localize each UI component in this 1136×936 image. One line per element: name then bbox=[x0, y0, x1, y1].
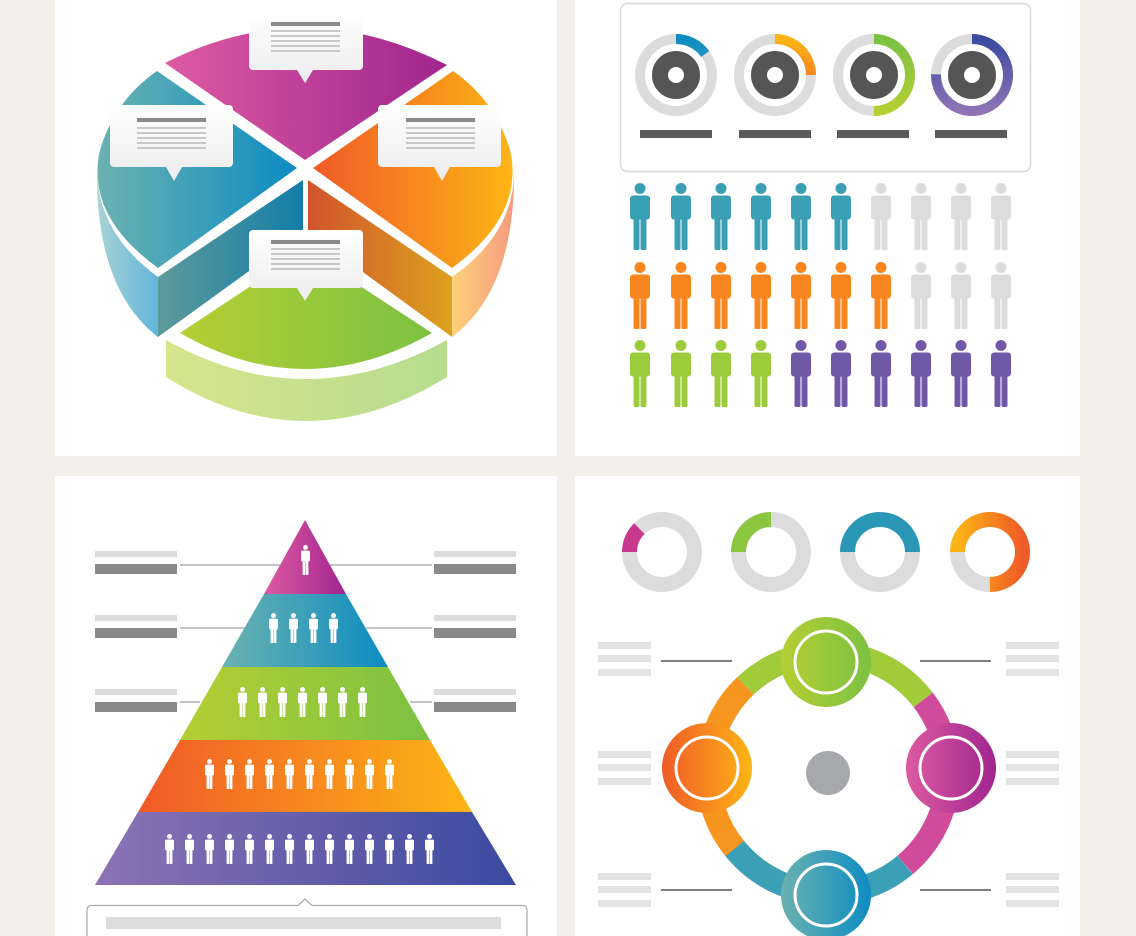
pyramid labels right bbox=[330, 551, 516, 712]
callout: right bbox=[378, 105, 501, 181]
pie slice: green bbox=[180, 250, 432, 369]
cycle ring bbox=[658, 603, 998, 936]
pyramid bbox=[95, 520, 516, 885]
panel: pyramid bbox=[55, 476, 557, 936]
center dot bbox=[806, 751, 850, 795]
pie left side face bbox=[97, 175, 158, 337]
side text lines bbox=[598, 642, 1059, 907]
people row 2 bbox=[630, 262, 1011, 329]
panel: people statistics bbox=[575, 0, 1080, 456]
callout: bottom bbox=[249, 230, 363, 301]
pyramid labels left bbox=[95, 551, 280, 712]
callout: left bbox=[110, 105, 233, 181]
panel: cycle diagram bbox=[575, 476, 1080, 936]
people row 3 bbox=[630, 340, 1011, 407]
donut summary box bbox=[620, 4, 1030, 172]
pie slice: teal bbox=[97, 71, 297, 268]
pie slice: orange bbox=[313, 71, 513, 268]
pie slice: magenta bbox=[165, 28, 447, 160]
cycle nodes bbox=[662, 617, 996, 936]
pie green base bbox=[166, 340, 447, 421]
callout: top bbox=[249, 12, 363, 83]
panel: pie chart bbox=[55, 0, 557, 456]
pie right inner face bbox=[308, 180, 452, 337]
pie left inner face bbox=[158, 180, 303, 337]
pyramid bottom callout bbox=[87, 899, 527, 936]
people row 1 bbox=[630, 183, 1011, 250]
small donuts bbox=[630, 520, 1022, 584]
pie right side face bbox=[452, 175, 514, 337]
